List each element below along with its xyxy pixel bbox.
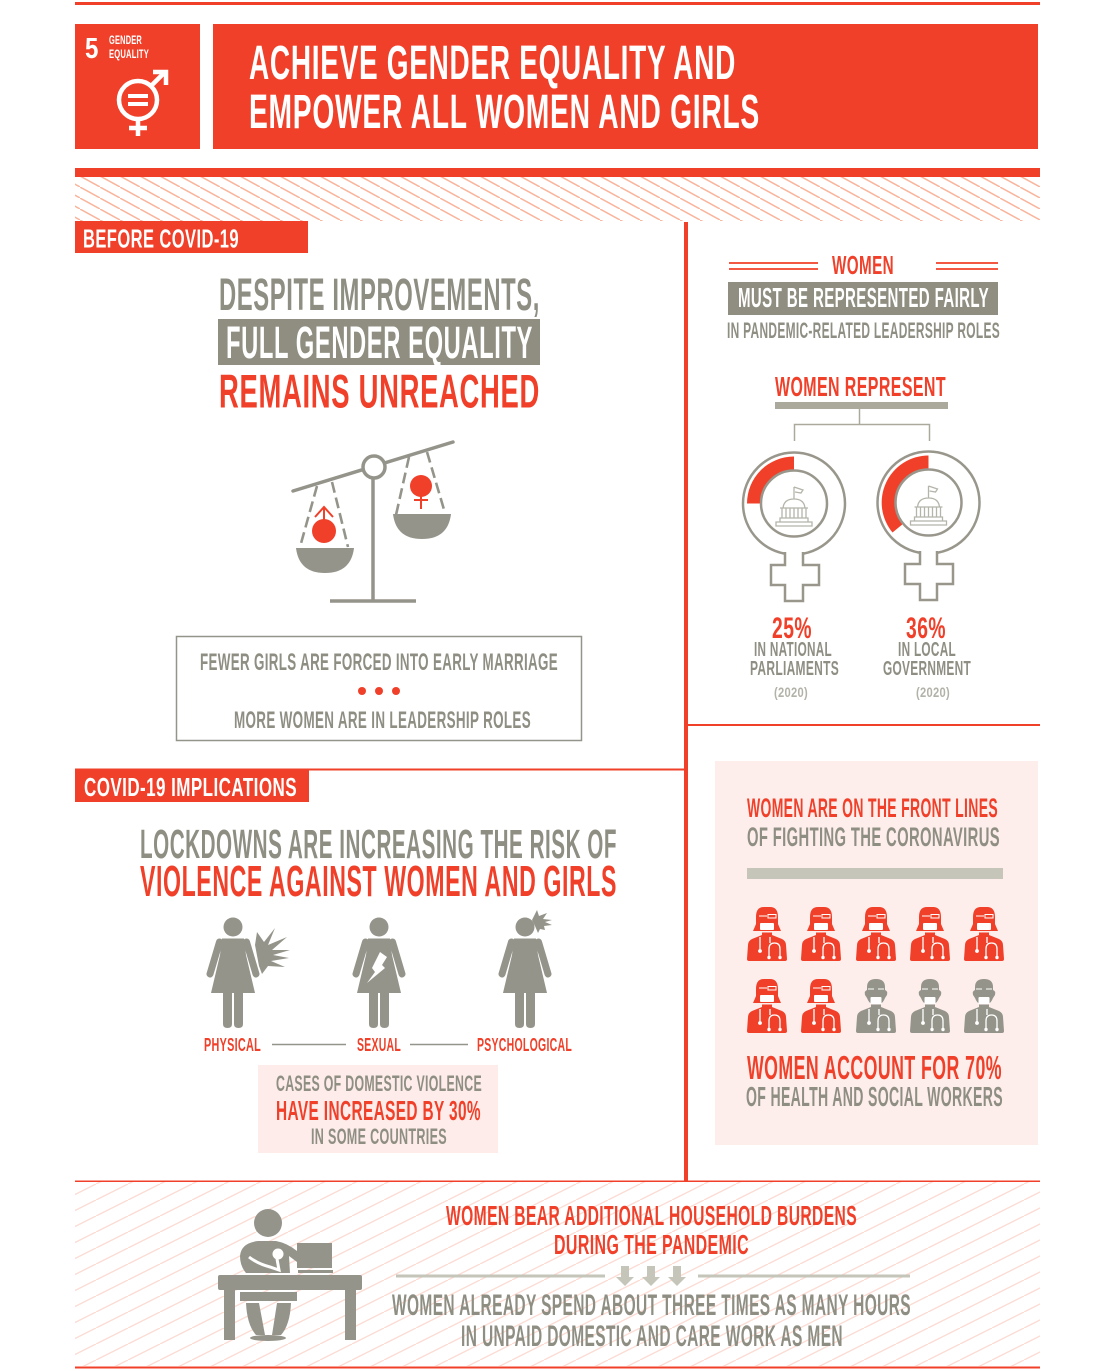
SDG 5 badge: EQUALITY: [109, 47, 149, 61]
SDG 5 badge: 5: [85, 33, 99, 65]
callout: domestic violence cases: IN SOME COUNTRIES: [311, 1124, 447, 1149]
headline: violence against women and girls: LOCKDOWNS ARE INCREASING THE RISK OF: [140, 821, 617, 867]
section tag: before covid-19: BEFORE COVID-19: [83, 224, 239, 254]
chart: 36% in local government: GOVERNMENT: [883, 658, 971, 680]
top rule: [75, 2, 1040, 5]
icon: psychological violence: [502, 910, 552, 1028]
panel: health workers: [715, 761, 1038, 1145]
headline: violence against women and girls: [140, 821, 617, 906]
callout: domestic violence cases: HAVE INCREASED BY 30%: [276, 1095, 481, 1126]
chart: 25% in national parliaments: (2020): [774, 684, 808, 700]
callout: domestic violence cases: CASES OF DOMESTIC VIOLENCE: [276, 1071, 482, 1096]
icon: gender equality symbol: [119, 72, 166, 136]
chart: 25% in national parliaments: [743, 452, 845, 700]
heading: women represent: [775, 371, 948, 441]
chart: 36% in local government: (2020): [916, 684, 950, 700]
chart: 36% in local government: 36%: [906, 612, 946, 645]
title banner: ACHIEVE GENDER EQUALITY AND: [249, 37, 736, 90]
divider with three down arrows: [396, 1266, 910, 1286]
chart: 25% in national parliaments: PARLIAMENTS: [750, 658, 839, 680]
headline: full gender equality remains unreached: [218, 269, 540, 418]
icon: physical violence: [210, 918, 290, 1028]
text: household burdens: DURING THE PANDEMIC: [554, 1229, 749, 1260]
icon: woman at desk with child: [218, 1209, 362, 1341]
icon: balance scale: [293, 442, 453, 601]
callout: domestic violence cases: [258, 1065, 498, 1153]
chart: 25% in national parliaments: 25%: [772, 612, 812, 645]
SDG 5 badge: [75, 24, 200, 149]
SDG 5 badge: GENDER: [109, 33, 142, 47]
section tag: covid-19 implications: COVID-19 IMPLICATIONS: [84, 772, 297, 802]
text: three times as many hours: [392, 1289, 911, 1353]
chart: 36% in local government: [878, 452, 980, 700]
violence type labels: SEXUAL: [357, 1035, 401, 1055]
violence type labels: PSYCHOLOGICAL: [477, 1035, 572, 1055]
heading: women must be represented fairly: [727, 250, 1000, 343]
chart: 25% in national parliaments: IN NATIONAL: [754, 639, 832, 661]
callout: progress before covid: [176, 636, 582, 740]
section tag: covid-19 implications: [75, 770, 309, 802]
chart: 36% in local government: IN LOCAL: [898, 639, 956, 661]
headline: violence against women and girls: VIOLENCE AGAINST WOMEN AND GIRLS: [140, 857, 617, 906]
headline: full gender equality remains unreached: DESPITE IMPROVEMENTS,: [219, 269, 540, 320]
violence type labels: PHYSICAL: [204, 1035, 261, 1055]
icon grid: 7 of 10 women health workers: [747, 907, 1004, 1033]
title banner: EMPOWER ALL WOMEN AND GIRLS: [249, 86, 760, 139]
heading: women represent: WOMEN REPRESENT: [775, 371, 946, 402]
icon: sexual violence: [356, 918, 402, 1028]
title banner: [213, 24, 1038, 149]
headline: full gender equality remains unreached: REMAINS UNREACHED: [219, 364, 540, 418]
text: household burdens: [446, 1200, 857, 1260]
heading: women must be represented fairly: WOMEN: [832, 250, 894, 280]
violence type labels: [204, 1035, 572, 1055]
callout: progress before covid: FEWER GIRLS ARE FORCED INTO EARLY MARRIAGE: [200, 649, 558, 676]
callout: progress before covid: MORE WOMEN ARE IN LEADERSHIP ROLES: [234, 707, 531, 734]
headline: full gender equality remains unreached: FULL GENDER EQUALITY: [226, 317, 533, 368]
